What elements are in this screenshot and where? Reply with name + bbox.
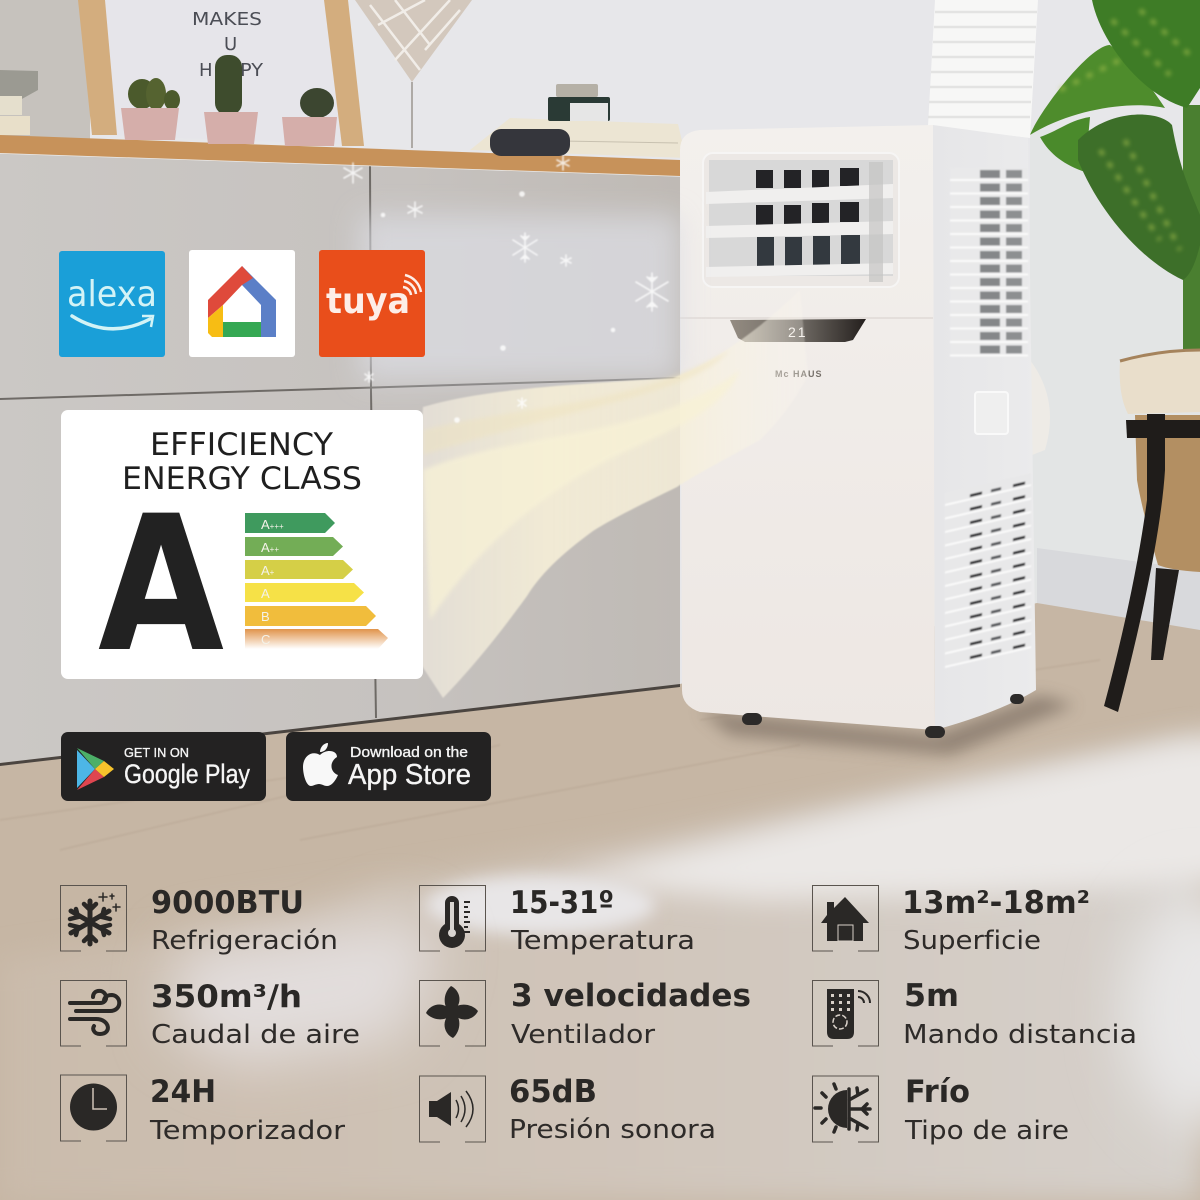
spec: remote: 5m — [904, 978, 959, 1014]
control display: 21 — [788, 324, 808, 340]
spec: air flow: Caudal de aire — [151, 1020, 360, 1050]
spec: air type — [812, 1074, 1069, 1146]
panel title: ENERGY CLASS — [122, 461, 362, 497]
button: App Store: App Store — [348, 759, 471, 791]
pipe behind unit — [1030, 360, 1050, 455]
logo: tuya — [319, 250, 425, 357]
spec: air type: Tipo de aire — [904, 1116, 1069, 1146]
spec: temperature: 15-31º — [510, 885, 614, 921]
stacked books left — [0, 70, 38, 135]
floor shadow under unit — [700, 695, 1075, 755]
button: Google Play: Google Play — [124, 759, 250, 789]
spec: surface: 13m²-18m² — [902, 885, 1090, 921]
spec: temperature: Temperatura — [510, 926, 695, 956]
energy scale bars — [245, 513, 388, 649]
spec: 9000BTU: Refrigeración — [151, 926, 338, 956]
portable air conditioner — [680, 125, 1036, 738]
spec: sound: Presión sonora — [509, 1115, 716, 1145]
large class letter: A — [98, 476, 224, 694]
basket pot on stand — [1104, 350, 1200, 712]
panel title: EFFICIENCY — [150, 427, 333, 463]
plant — [1030, 0, 1200, 355]
logo: alexa — [59, 251, 165, 357]
side handle — [975, 392, 1008, 434]
upper side grille — [950, 168, 1028, 357]
icon: wind — [70, 991, 119, 1034]
blurred foreground — [0, 730, 1200, 1200]
button: Google Play: GET IN ON — [124, 745, 189, 760]
energy scale bars: B — [261, 609, 270, 624]
spec: timer: Temporizador — [149, 1116, 345, 1146]
icon: sun and snow — [815, 1084, 870, 1132]
logo: Google Home — [189, 250, 295, 357]
button: App Store — [286, 732, 491, 801]
logo: tuya: tuya — [326, 281, 410, 322]
spec: surface: Superficie — [903, 926, 1041, 956]
panel title — [122, 427, 362, 497]
energy scale bars: A+++ — [261, 517, 284, 532]
snowflakes — [344, 156, 668, 422]
woven heart decoration — [355, 0, 472, 148]
icon: thermometer — [439, 896, 470, 948]
wall art frame: H — [199, 60, 213, 81]
icon: apple — [303, 743, 338, 786]
energy scale bars: A++ — [261, 540, 279, 555]
spec: temperature — [420, 885, 695, 956]
wall art frame: MAKES — [192, 9, 262, 30]
icon: snowflake — [70, 893, 120, 944]
wall art frame: PY — [240, 60, 264, 81]
icon: house — [821, 897, 869, 941]
control display — [730, 319, 866, 342]
spec: air flow: 350m³/h — [151, 979, 302, 1015]
spec: air flow — [60, 979, 360, 1050]
energy scale bars: A+ — [261, 563, 275, 578]
air vent — [703, 153, 899, 287]
wheels — [742, 694, 1024, 738]
icon: clock — [70, 1084, 117, 1130]
button: App Store: Download on the — [350, 744, 468, 761]
spec: 9000BTU — [60, 885, 338, 956]
panel: energy class — [61, 410, 423, 694]
lower side grille — [945, 473, 1031, 668]
spec: timer — [60, 1074, 345, 1146]
spec: remote: Mando distancia — [903, 1020, 1137, 1050]
brand logo: Mc HAUS — [775, 369, 823, 379]
spec: air type: Frío — [905, 1074, 970, 1110]
button: Google Play — [61, 732, 266, 801]
logo: alexa: alexa — [67, 274, 157, 315]
spec: surface — [812, 885, 1090, 956]
spec: fan speeds — [420, 978, 751, 1050]
wall art frame — [78, 0, 364, 146]
energy scale bars: A — [261, 586, 270, 601]
spec: sound — [420, 1074, 716, 1145]
icon: remote control — [827, 989, 870, 1039]
spec: timer: 24H — [150, 1074, 216, 1110]
spec: 9000BTU: 9000BTU — [151, 885, 304, 921]
cactus pots — [121, 55, 337, 146]
spec: sound: 65dB — [509, 1074, 597, 1110]
shelf objects — [470, 84, 686, 158]
spec: remote — [812, 978, 1137, 1050]
wall art frame: U — [224, 34, 237, 55]
spec: fan speeds: Ventilador — [511, 1020, 655, 1050]
icon: speaker — [429, 1091, 473, 1127]
exhaust hose — [928, 0, 1038, 138]
air flow swoosh — [360, 215, 808, 698]
spec: fan speeds: 3 velocidades — [511, 978, 751, 1014]
icon: fan — [426, 986, 478, 1038]
icon: play — [77, 748, 114, 790]
energy scale bars: C — [261, 632, 270, 647]
